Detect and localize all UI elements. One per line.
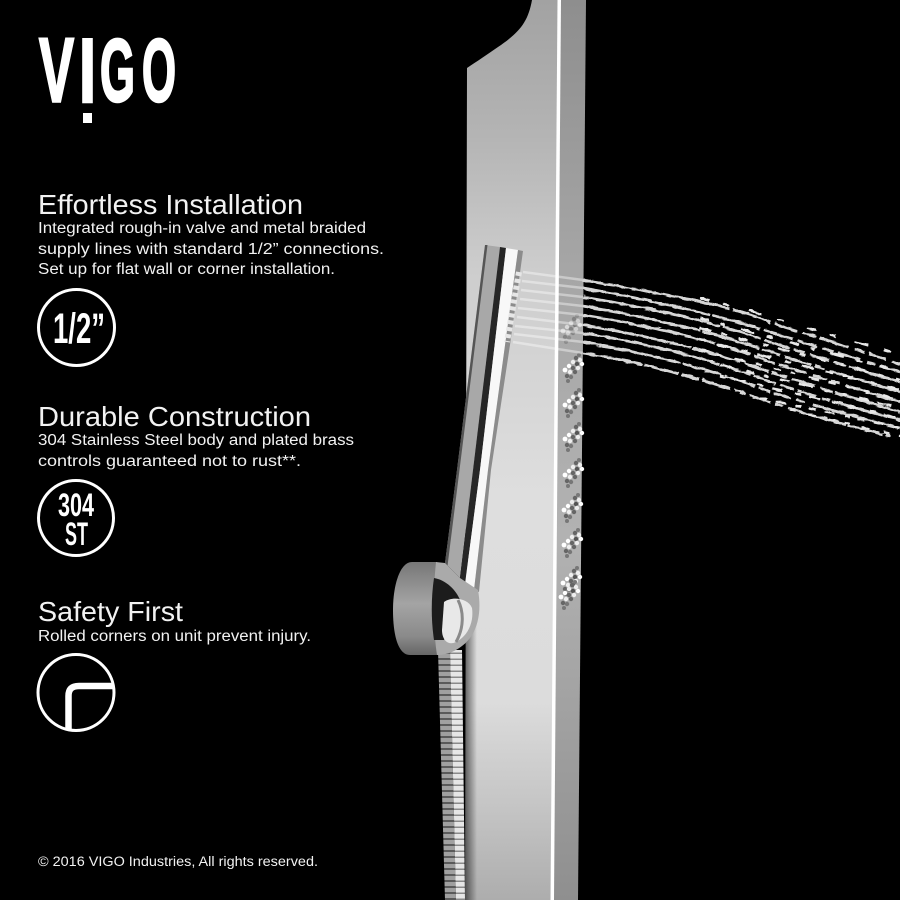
copyright: © 2016 VIGO Industries, All rights reserved.: [38, 854, 318, 869]
shower panel: [465, 0, 586, 900]
badge: 304 stainless steel: 304: [58, 487, 94, 523]
description: supply lines with standard 1/2” connections.: [38, 241, 384, 258]
badge: rolled corner: [38, 654, 114, 730]
badge: 1/2 inch: 1/2”: [53, 305, 105, 353]
bracket cylinder: [393, 562, 437, 655]
wall bracket: [393, 562, 479, 655]
VIGO logo: G: [100, 20, 135, 120]
badge: 304 stainless steel: [38, 480, 114, 556]
text: O: [142, 20, 176, 120]
handle dark stripe: [460, 247, 506, 584]
badge: 1/2 inch: [38, 290, 114, 366]
description: Integrated rough-in valve and metal braided: [38, 220, 366, 237]
chrome socket: [432, 562, 479, 655]
panel front face: [465, 0, 558, 900]
VIGO logo: I: [79, 21, 96, 122]
description: [38, 220, 384, 278]
hand shower: [445, 245, 523, 592]
heading: Effortless Installation: [38, 189, 303, 220]
description: [38, 432, 354, 470]
description: Set up for flat wall or corner installation.: [38, 261, 335, 278]
handle white highlight: [465, 248, 518, 590]
description: Rolled corners on unit prevent injury.: [38, 628, 311, 645]
heading: Durable Construction: [38, 401, 311, 432]
water spray: [583, 280, 900, 436]
badge: 304 stainless steel: ST: [65, 516, 88, 552]
spray head nozzles: [507, 272, 519, 342]
panel side face: [552, 0, 586, 900]
panel seam highlight: [550, 0, 561, 900]
heading: Safety First: [38, 596, 183, 627]
description: 304 Stainless Steel body and plated brass: [38, 432, 354, 449]
body spray nozzles: [559, 314, 584, 610]
description: controls guaranteed not to rust**.: [38, 453, 301, 470]
section: durable construction: [38, 401, 354, 556]
handle right band: [474, 250, 523, 592]
VIGO logo: V: [39, 20, 74, 122]
section: effortless installation: [38, 189, 384, 366]
section: safety first: [38, 596, 311, 730]
handle grey band: [445, 245, 500, 578]
VIGO logo: [39, 20, 176, 123]
water jets over panel: [513, 272, 583, 353]
metal hose: [438, 650, 465, 900]
